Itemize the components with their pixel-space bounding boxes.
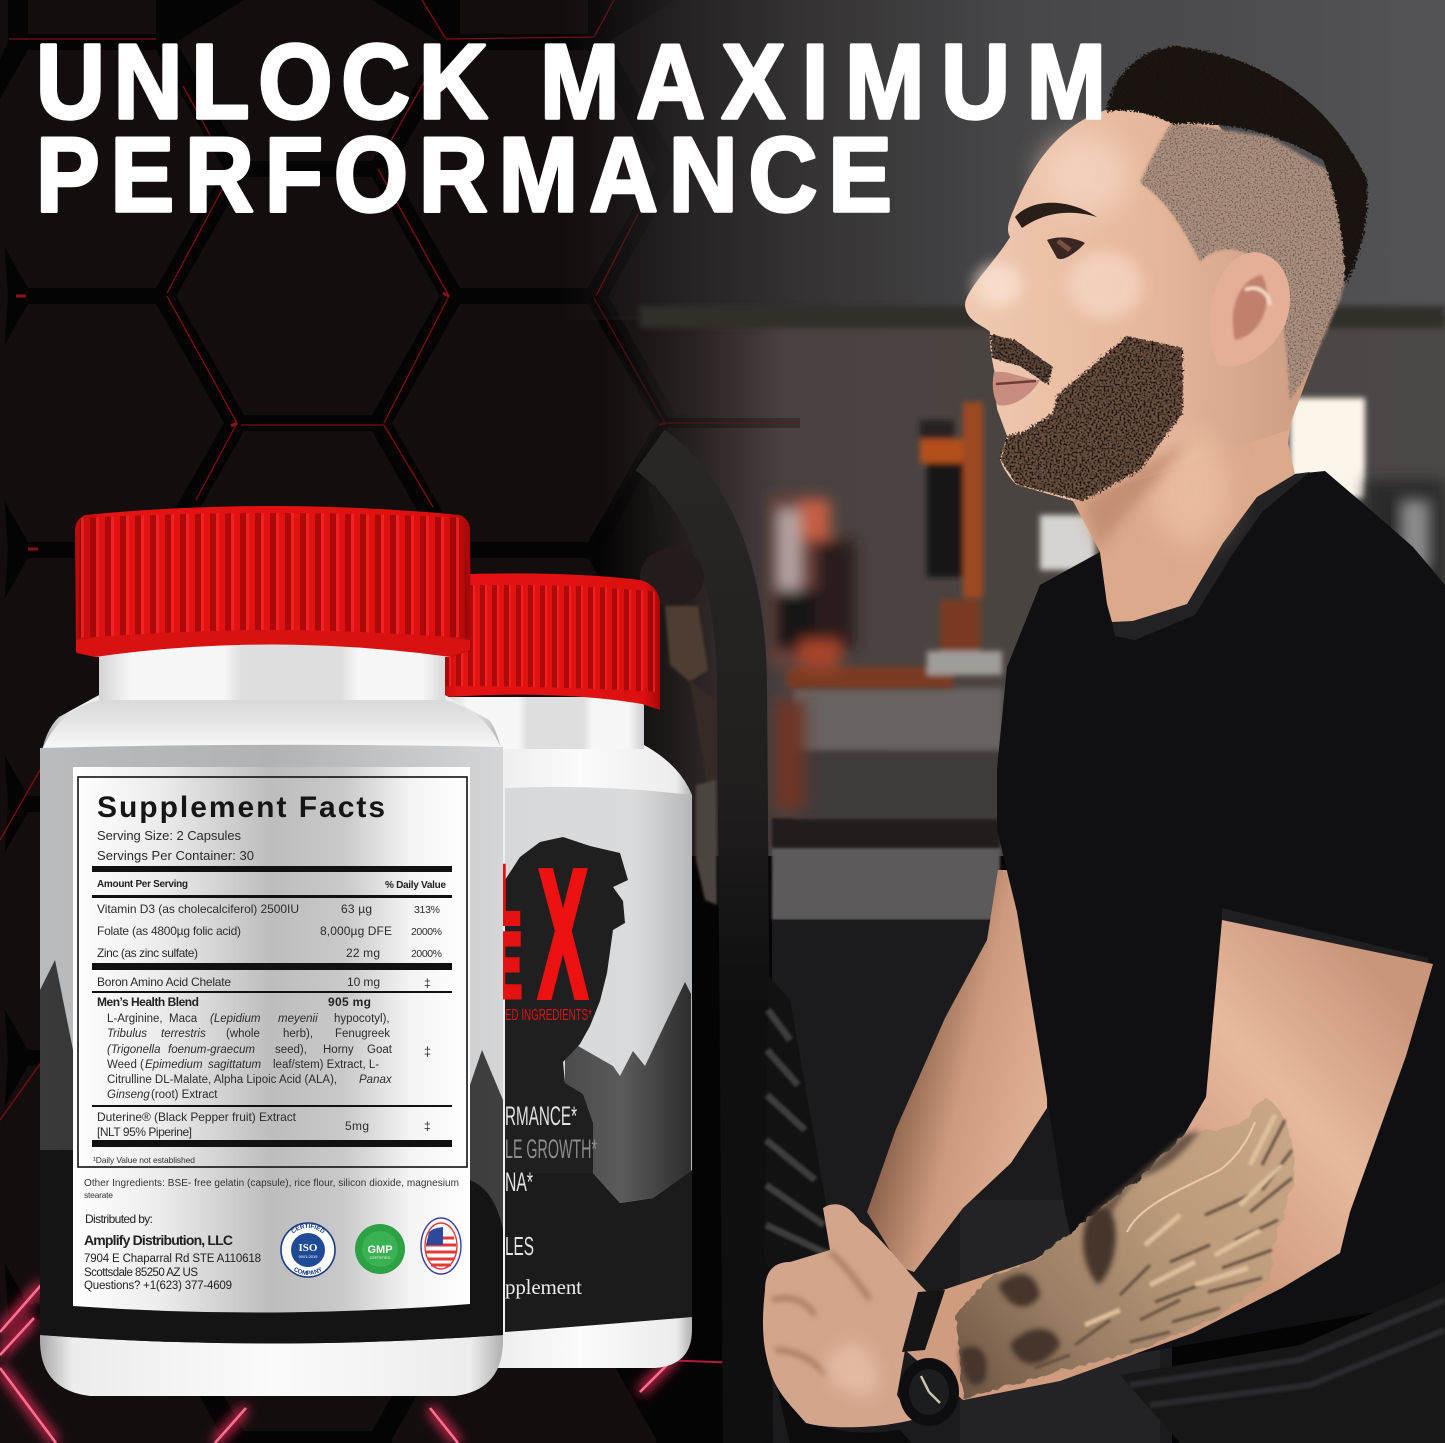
front bottle label	[40, 744, 503, 1344]
hexagon pattern background	[0, 0, 872, 1443]
right forearm	[905, 920, 1433, 1400]
man figure	[763, 46, 1445, 1443]
hexagon lines over gym	[594, 296, 800, 545]
boron row: ‡	[424, 976, 431, 990]
folate row	[97, 924, 442, 938]
blend ingredients text: (Trigonella	[107, 1044, 160, 1056]
shorts	[1120, 1282, 1445, 1443]
hair	[1106, 46, 1367, 285]
label white panel	[73, 767, 470, 1313]
other ingredients: stearate	[84, 1190, 113, 1200]
zinc row: Zinc (as zinc sulfate)	[97, 946, 198, 960]
back bottle neck	[447, 697, 644, 749]
benefit line one: RMANCE*	[505, 1101, 577, 1131]
rule	[92, 895, 452, 898]
supplement facts heading: Supplement Facts	[97, 791, 385, 824]
ear	[1210, 252, 1290, 367]
distributor details	[84, 1212, 261, 1292]
blend ingredients text: meyenii	[278, 1013, 318, 1025]
front bottle	[40, 506, 544, 1396]
ingredients line: ED INGREDIENTS*	[505, 1007, 592, 1024]
blend ingredients text: (whole	[226, 1028, 260, 1040]
other ingredients: Other Ingredients: BSE- free gelatin (capsule), rice flour, silicon dioxide, magnesium	[84, 1178, 459, 1189]
blend ingredients text: foenum-graecum	[168, 1044, 255, 1056]
folate row: Folate (as 4800µg folic acid)	[97, 924, 241, 938]
thick rule	[92, 963, 452, 970]
thick rule	[92, 1140, 452, 1147]
pink neon floor lines	[0, 1284, 770, 1443]
neck	[1073, 320, 1295, 622]
blend ingredients text: (Lepidium	[210, 1013, 261, 1025]
iso badge: COMPANY	[294, 1266, 322, 1275]
back bottle	[440, 573, 692, 1368]
serving size: Serving Size: 2 Capsules	[97, 828, 242, 843]
zinc row	[97, 946, 442, 960]
eagle silhouette	[505, 837, 628, 1173]
vitamin d3 row	[97, 902, 440, 916]
left forearm	[867, 870, 1048, 1272]
supplement facts box	[78, 777, 467, 1167]
benefit line three: NA*	[505, 1167, 533, 1197]
face highlights	[974, 135, 1230, 552]
blend ingredients text: Weed (	[107, 1059, 144, 1071]
distributor details: Amplify Distribution, LLC	[84, 1232, 233, 1248]
iso badge: CERTIFIED	[291, 1224, 324, 1233]
distributor details: Scottsdale 85250 AZ US	[84, 1267, 198, 1279]
servings per container: Servings Per Container: 30	[97, 848, 254, 863]
footnote: ¹Daily Value not established	[93, 1155, 195, 1165]
distributor details: 7904 E Chaparral Rd STE A110618	[84, 1253, 261, 1265]
head and face	[965, 100, 1340, 501]
battle rope pole and chain	[640, 450, 748, 1443]
label dark base	[40, 960, 503, 1344]
rule	[92, 1105, 452, 1107]
back bottle label: L	[496, 850, 520, 941]
hand on rope	[763, 1204, 927, 1427]
blend ingredients text: sagittatum	[208, 1059, 261, 1071]
back bottle label	[496, 787, 692, 1332]
duterine row: 5mg	[345, 1119, 369, 1133]
capsules text: LES	[505, 1231, 534, 1261]
front bottle cap	[75, 506, 471, 657]
blend ingredients text: L-Arginine,	[107, 1013, 163, 1025]
shirt	[997, 471, 1445, 1360]
boron row	[97, 975, 431, 990]
blend ingredients text: Epimedium	[145, 1059, 203, 1071]
supplement text: pplement	[505, 1275, 582, 1299]
boron row: 10 mg	[347, 975, 380, 989]
duterine row: [NLT 95% Piperine]	[97, 1125, 192, 1139]
back bottle label: E	[496, 915, 522, 1017]
rope	[764, 975, 912, 1443]
mens health blend	[97, 995, 371, 1009]
blend ingredients text: terrestris	[161, 1028, 206, 1040]
gmp badge: CERTIFIED	[369, 1255, 391, 1260]
zinc row: 22 mg	[346, 946, 380, 960]
boron row: Boron Amino Acid Chelate	[97, 975, 231, 989]
blend ingredients text: Citrulline DL-Malate, Alpha Lipoic Acid (ALA),	[107, 1074, 337, 1086]
title: UNLOCK	[36, 23, 488, 141]
front bottle body	[40, 695, 503, 1396]
back bottle label: X	[539, 834, 587, 1035]
iso badge: 9001:2015	[299, 1254, 318, 1259]
iso badge: ISO	[299, 1242, 318, 1254]
front bottle shoulder	[43, 700, 501, 748]
benefit line two: LE GROWTH*	[505, 1134, 597, 1164]
vitamin d3 row: Vitamin D3 (as cholecalciferol) 2500IU	[97, 902, 299, 916]
vitamin d3 row: 313%	[414, 904, 440, 916]
duterine row: Duterine® (Black Pepper fruit) Extract	[97, 1110, 297, 1124]
back label mountains	[565, 982, 691, 1203]
gmp badge	[355, 1224, 405, 1274]
shaved fade	[1140, 122, 1367, 400]
other ingredients	[84, 1178, 459, 1200]
blend dagger: ‡	[424, 1045, 431, 1059]
duterine row: ‡	[424, 1119, 431, 1133]
eye and brow	[1015, 203, 1097, 259]
blend ingredients text	[107, 1013, 393, 1101]
blend ingredients text: herb),	[283, 1028, 313, 1040]
front bottle neck	[95, 643, 451, 700]
wing tattoo	[956, 1097, 1295, 1399]
gmp badge: GMP	[367, 1244, 393, 1256]
blend ingredients text: Fenugreek	[335, 1028, 390, 1040]
amount per serving header: Amount Per Serving	[97, 879, 188, 890]
title: MAXIMUM	[540, 23, 1106, 141]
blend ingredients text: Tribulus	[107, 1028, 147, 1040]
thick rule	[92, 866, 452, 872]
blend ingredients text: Maca	[169, 1013, 198, 1025]
rule	[92, 991, 452, 993]
daily value header: % Daily Value	[385, 880, 446, 891]
mens health blend: Men’s Health Blend	[97, 995, 199, 1009]
folate row: 8,000µg DFE	[320, 924, 392, 938]
moustache and lips	[990, 334, 1053, 406]
back bottle body	[470, 745, 692, 1368]
title: PERFORMANCE	[36, 116, 892, 234]
blend ingredients text: hypocotyl),	[334, 1013, 390, 1025]
distributor details: Questions? +1(623) 377-4609	[84, 1280, 232, 1292]
blend ingredients text: Panax	[359, 1074, 393, 1086]
blend ingredients text: (root) Extract	[151, 1089, 218, 1101]
folate row: 2000%	[411, 926, 442, 938]
vitamin d3 row: 63 µg	[341, 902, 372, 916]
beard	[1000, 336, 1183, 501]
gym background photo area	[560, 0, 1445, 1443]
mens health blend: 905 mg	[328, 995, 371, 1009]
zinc row: 2000%	[411, 948, 442, 960]
blend ingredients text: seed),	[275, 1044, 307, 1056]
title	[36, 23, 1106, 234]
wristwatch	[899, 1290, 959, 1426]
blend ingredients text: leaf/stem) Extract, L-	[273, 1059, 379, 1071]
blend ingredients text: Goat	[367, 1044, 393, 1056]
blend ingredients text: Ginseng	[107, 1089, 150, 1101]
duterine row	[97, 1110, 431, 1139]
back bottle cap	[440, 573, 660, 710]
distributor details: Distributed by:	[85, 1212, 153, 1226]
usa flag badge	[421, 1218, 461, 1274]
iso badge	[280, 1222, 336, 1278]
blend ingredients text: Horny	[323, 1044, 354, 1056]
